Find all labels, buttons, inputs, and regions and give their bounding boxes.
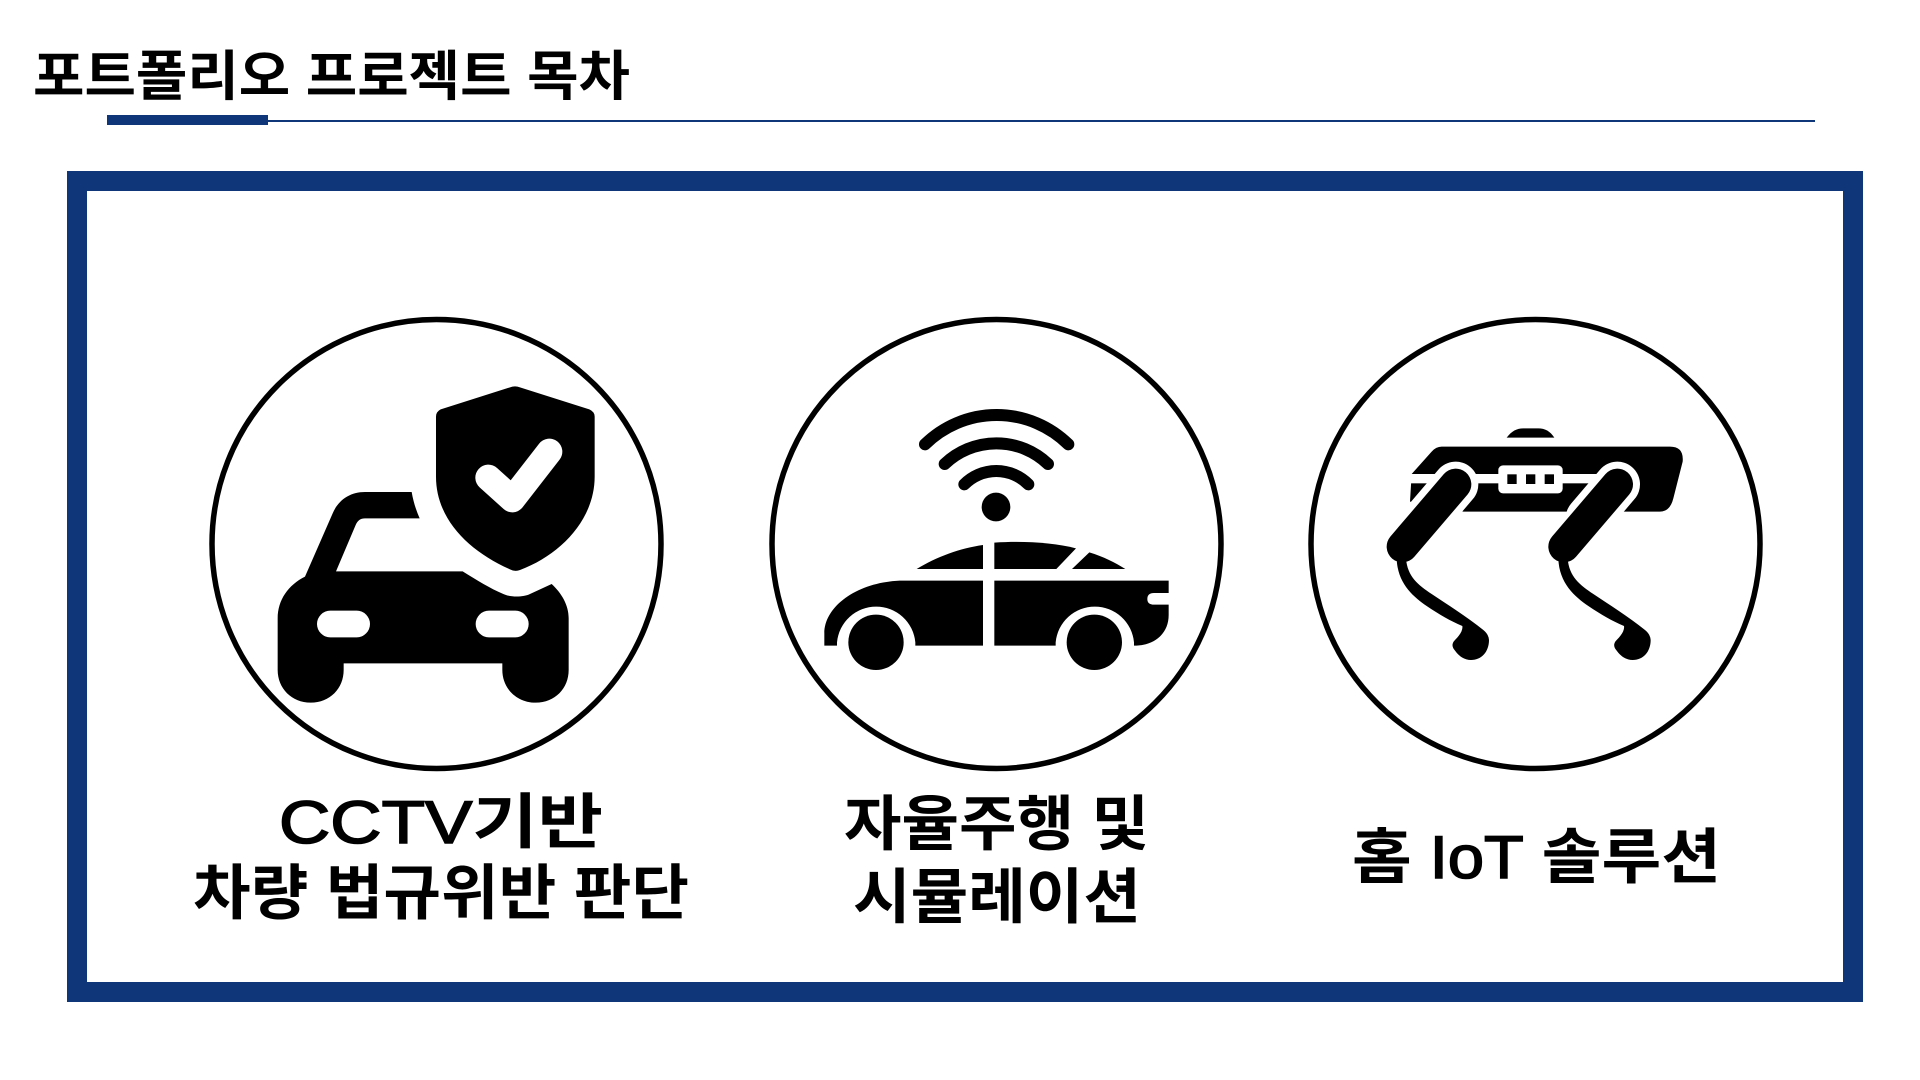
- label 2: [844, 791, 1149, 931]
- icon: robot dog: [1397, 428, 1683, 660]
- label 1: 차량 법규위반 판단: [193, 860, 689, 927]
- label 1: [193, 789, 689, 927]
- panel: project frame: [77, 181, 1853, 992]
- label 2: 자율주행 및: [844, 791, 1149, 858]
- label 1: CCTV 기반: [279, 789, 603, 856]
- icon circle 1: [212, 320, 661, 768]
- icon: car with shield: [278, 386, 595, 703]
- project 2: autonomous driving: [772, 320, 1221, 931]
- title underline: [107, 115, 1815, 125]
- label 2: 시뮬레이션: [853, 864, 1141, 931]
- title: 포트폴리오 프로젝트 목차: [33, 47, 630, 107]
- label 3: 홈 IoT 솔루션: [1352, 824, 1721, 891]
- project 1: CCTV: [193, 320, 689, 927]
- icon circle 3: [1311, 320, 1760, 768]
- icon circle 2: [772, 320, 1221, 768]
- project 3: home IoT: [1311, 320, 1760, 891]
- icon: connected car: [824, 415, 1169, 670]
